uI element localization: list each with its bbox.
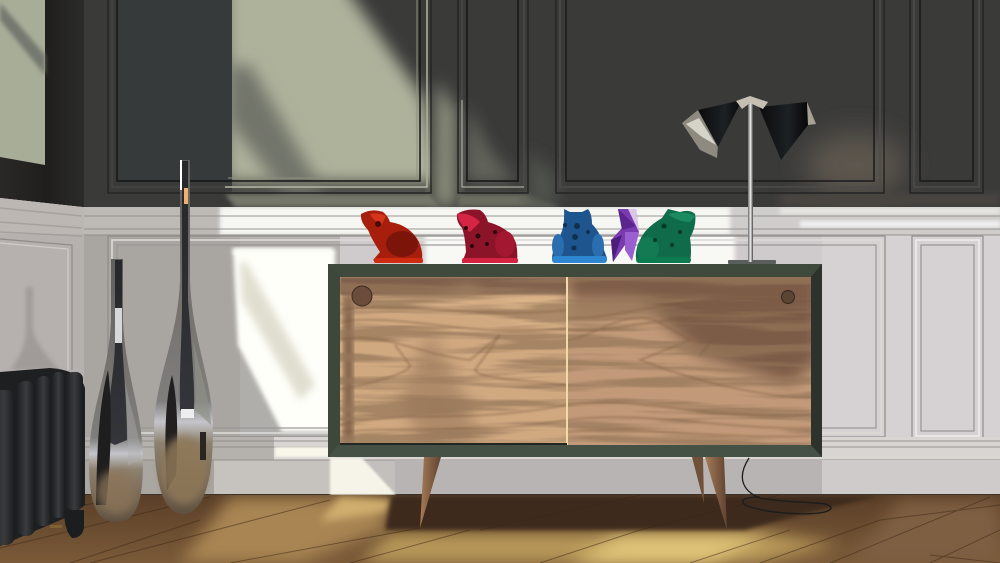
crimson frog	[457, 210, 518, 263]
sideboard	[328, 264, 822, 530]
sideboard floor shadow	[385, 496, 880, 530]
baseboard	[85, 437, 1000, 495]
sideboard frame	[328, 264, 822, 457]
panel moulding 3	[556, 0, 884, 193]
door pull left	[352, 286, 372, 306]
sunlight on wainscot	[233, 250, 335, 432]
sunlight on floor	[180, 497, 1000, 563]
panel moulding 1	[108, 0, 431, 193]
lamp right shade	[759, 102, 816, 160]
white wainscoting	[0, 195, 1000, 496]
corner panel moulding	[0, 239, 72, 370]
lamp cord	[742, 458, 831, 514]
wood grain lines	[340, 298, 811, 437]
sideboard legs	[420, 457, 727, 530]
lamp base	[728, 260, 776, 264]
panel moulding 4	[910, 0, 983, 193]
table lamp	[682, 96, 816, 264]
lamp pole	[748, 99, 753, 262]
small chrome vase	[89, 259, 143, 522]
tall chrome vase	[154, 160, 213, 514]
lower panel moulding right	[912, 236, 983, 440]
wood floor	[0, 495, 1000, 563]
cornice	[0, 198, 1000, 236]
red frog	[361, 210, 423, 263]
green frog	[636, 209, 695, 263]
lamp bracket	[736, 96, 768, 109]
upper wall panels	[108, 0, 983, 193]
blue frog	[552, 209, 607, 263]
radiator foot	[64, 510, 84, 538]
lamp left shade	[682, 100, 742, 158]
panel moulding 2	[458, 0, 528, 193]
lower panel moulding left	[108, 236, 885, 437]
vase shadows on corner wall	[10, 287, 60, 370]
sliding doors	[340, 270, 820, 445]
sunlight on upper wall	[225, 0, 1000, 207]
radiator	[0, 368, 85, 546]
floor plank lines	[0, 495, 1000, 563]
purple origami	[611, 209, 639, 262]
door pull right	[782, 290, 794, 304]
mirror on left wall	[0, 0, 45, 165]
upper dark wall	[0, 0, 1000, 207]
